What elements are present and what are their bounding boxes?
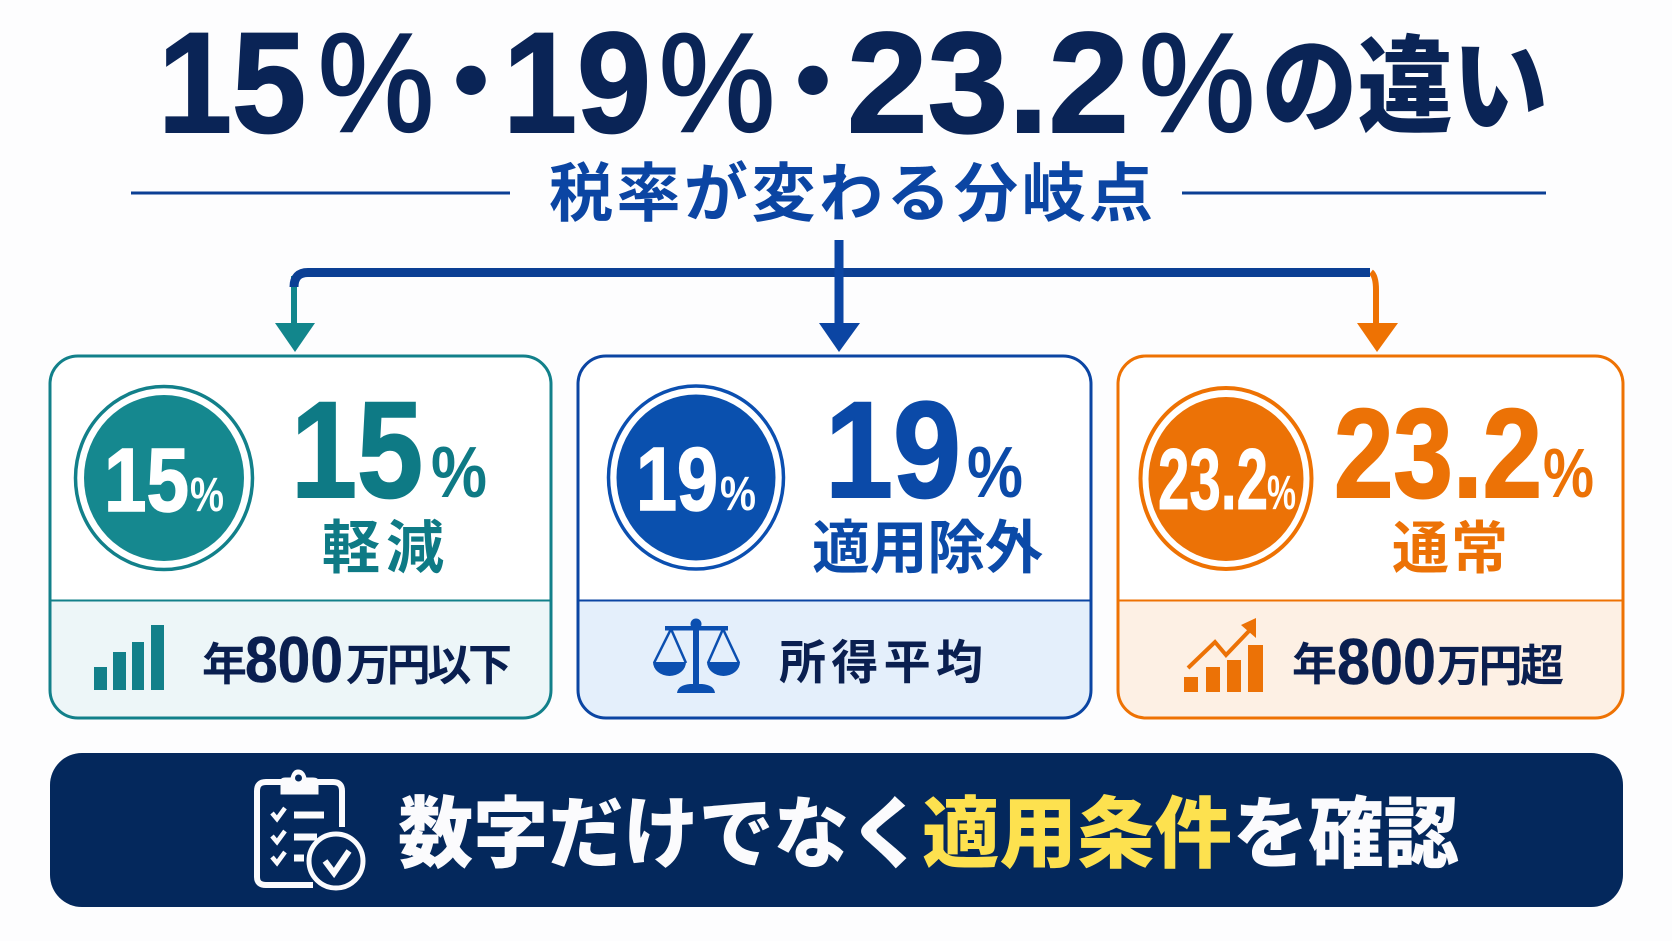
panel: 15% reduced (50, 356, 551, 718)
title (158, 0, 1548, 163)
badge: 15%: 15 (104, 431, 189, 531)
condition: 年800万円超: 年 (1292, 639, 1337, 690)
rate: 15%: 15 (291, 374, 423, 527)
branching arrows (275, 240, 1398, 352)
badge: 23.2% (1140, 388, 1312, 569)
condition: 年800万円以下: 年 (202, 639, 247, 690)
banner (50, 753, 1623, 907)
rate: 15%: % (431, 433, 487, 513)
icon: bars (94, 625, 164, 690)
condition: 年800万円以下: 800 (245, 623, 343, 696)
message: 数字だけでなく (398, 790, 924, 878)
message: 適用条件 (922, 790, 1232, 878)
message (398, 790, 1459, 878)
icon: rising chart (1184, 618, 1263, 692)
panel: 19% excluded (578, 356, 1091, 718)
title: % (1139, 4, 1255, 161)
label: 軽減: 軽減 (322, 516, 444, 581)
title: 19 (503, 4, 651, 163)
icon: balance scale (653, 618, 740, 693)
condition: 年800万円超: 800 (1337, 625, 1436, 698)
icon: clipboard with check (257, 770, 363, 888)
badge: 19% (608, 386, 784, 569)
title: の違い (1262, 29, 1548, 147)
rate: 19%: 19 (825, 374, 961, 527)
rate: 23.2%: 23.2 (1334, 383, 1542, 524)
condition: 所得平均: 所得平均 (779, 636, 983, 689)
title: 23.2 (847, 4, 1129, 163)
condition: 年800万円以下: 万円以下 (346, 641, 512, 690)
badge: 23.2%: % (1267, 467, 1296, 520)
title: % (318, 4, 434, 161)
title: 15 (158, 4, 306, 163)
badge: 15% (76, 386, 252, 570)
panel: 23.2% standard (1118, 356, 1623, 718)
badge: 15%: % (190, 469, 224, 522)
badge: 19%: % (720, 468, 756, 521)
rate: 19%: % (967, 433, 1023, 513)
condition: 年800万円超: 万円超 (1437, 642, 1564, 691)
condition: 年800万円以下 (202, 623, 512, 696)
label: 適用除外: 適用除外 (812, 516, 1043, 581)
title: % (659, 4, 775, 161)
rate: 23.2%: % (1543, 434, 1594, 512)
condition: 年800万円超 (1292, 625, 1564, 698)
badge: 23.2%: 23.2 (1158, 432, 1268, 528)
message: を確認 (1233, 790, 1459, 878)
badge: 19%: 19 (636, 430, 718, 530)
subtitle with rules: 税率が変わる分岐点 (549, 158, 1153, 230)
label: 通常: 通常 (1392, 517, 1508, 581)
